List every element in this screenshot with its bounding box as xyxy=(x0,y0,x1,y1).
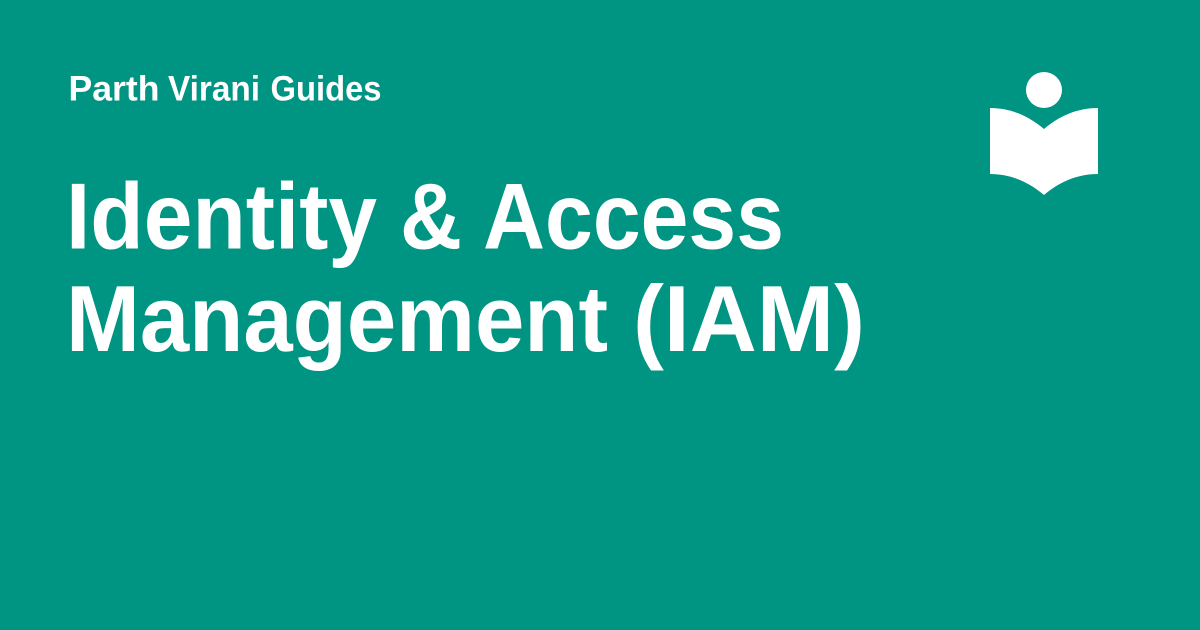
icon: reader with open book xyxy=(990,72,1098,195)
title: Identity & Access Management (IAM): (IAM) xyxy=(633,266,865,371)
subtitle: Parth Virani Guides xyxy=(68,70,382,108)
title: Identity & Access Management (IAM): Management xyxy=(66,266,608,371)
subtitle: Parth Virani Guides: Guides xyxy=(270,70,382,108)
title: Identity & Access Management (IAM): Identity xyxy=(66,163,377,268)
subtitle: Parth Virani Guides: Virani xyxy=(168,70,260,108)
title: Identity & Access Management (IAM) xyxy=(66,163,865,371)
title: Identity & Access Management (IAM): Access xyxy=(483,163,784,268)
subtitle: Parth Virani Guides: Parth xyxy=(68,70,160,108)
title: Identity & Access Management (IAM): & xyxy=(400,163,462,268)
